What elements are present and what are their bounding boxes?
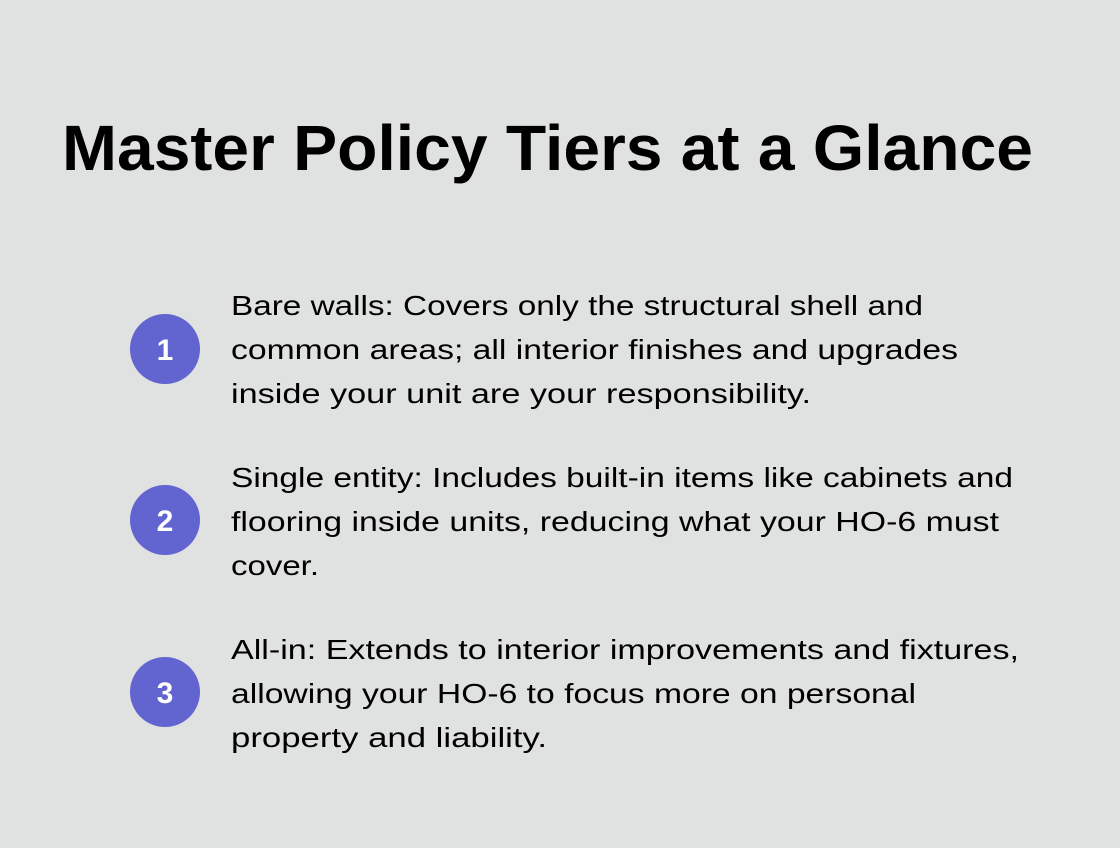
text block 2	[231, 462, 1013, 581]
text block 1: Bare walls: Covers only the structural shell and	[231, 290, 923, 321]
item 3: all-in	[130, 634, 1019, 753]
icon: number 1 badge: 1	[157, 334, 173, 367]
item 2: single entity	[130, 462, 1013, 581]
text block 1: inside your unit are your responsibility.	[231, 378, 811, 409]
icon: number 2 badge: 2	[157, 505, 173, 538]
text block 3: allowing your HO-6 to focus more on personal	[231, 678, 916, 709]
text block 3: All-in: Extends to interior improvements and fixtures,	[231, 634, 1019, 665]
text block 3: property and liability.	[231, 722, 547, 753]
icon: number 3 badge	[130, 657, 200, 727]
icon: number 2 badge	[130, 485, 200, 555]
item 1: bare walls	[130, 290, 958, 409]
text block 2: Single entity: Includes built-in items like cabinets and	[231, 462, 1013, 493]
text block 1	[231, 290, 958, 409]
text block 2: cover.	[231, 550, 319, 581]
text block 1: common areas; all interior finishes and upgrades	[231, 334, 958, 365]
icon: number 1 badge	[130, 314, 200, 384]
text block 2: flooring inside units, reducing what your HO-6 must	[231, 506, 999, 537]
title: Master Policy Tiers at a Glance	[62, 112, 1033, 184]
text block 3	[231, 634, 1019, 753]
icon: number 3 badge: 3	[157, 677, 173, 710]
